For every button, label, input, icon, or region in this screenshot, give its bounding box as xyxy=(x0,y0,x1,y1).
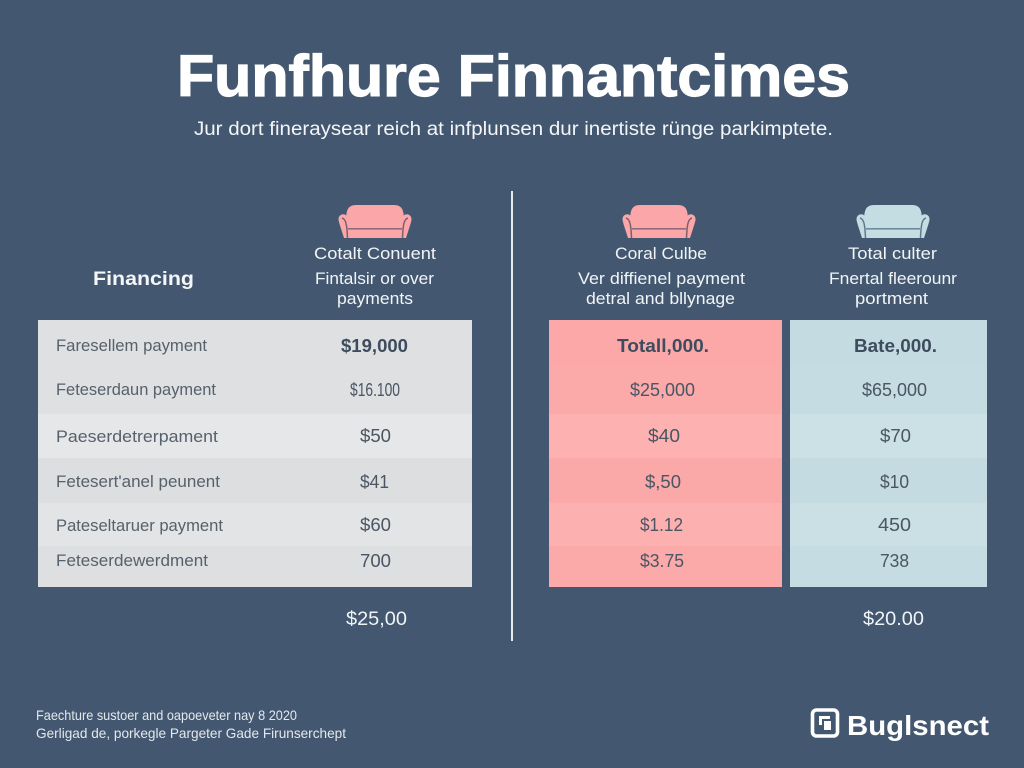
panel: coral table: $3.75 xyxy=(640,551,684,571)
row heading: Financing: Financing xyxy=(93,269,194,290)
panel: gray table: Pateseltaruer payment xyxy=(56,516,223,535)
total, gray column: $25,00 xyxy=(346,609,407,630)
total, blue column: $20.00 xyxy=(863,609,924,630)
panel: coral table: $1.12 xyxy=(640,515,683,535)
panel: light blue table: $70 xyxy=(880,426,911,446)
footer note xyxy=(36,707,346,741)
panel: gray table: $50 xyxy=(360,426,391,446)
panel: gray table: 700 xyxy=(360,551,391,571)
column 1 header: Fintalsir or over xyxy=(315,269,434,288)
column 2 header: detral and bllynage xyxy=(586,289,735,308)
panel: gray table: Fetesert'anel peunent xyxy=(56,472,220,491)
column 3 header: portment xyxy=(855,289,928,308)
subtitle: Jur dort fineraysear reich at infplunsen dur inertiste rünge parkimptete. xyxy=(194,119,833,140)
column 3 header xyxy=(829,244,957,308)
panel: gray table: Paeserdetrerpament xyxy=(56,427,218,446)
panel: coral table: $25,000 xyxy=(630,380,695,400)
panel: gray table: Feteserdaun payment xyxy=(56,380,216,399)
panel: coral table xyxy=(549,320,782,587)
icon: coral sofa, column 1 xyxy=(338,205,412,238)
panel: light blue table: 738 xyxy=(880,551,909,571)
panel: coral table: $,50 xyxy=(645,472,681,492)
logo wordmark: Buglsnect xyxy=(847,710,989,741)
panel: gray table: $16.100 xyxy=(350,380,400,400)
footer note: Gerligad de, porkegle Pargeter Gade Firunserchept xyxy=(36,725,346,741)
panel: light blue table xyxy=(790,320,987,587)
icon: logo mark xyxy=(812,710,838,736)
icon: light blue sofa, column 3 xyxy=(856,205,930,238)
panel: coral table: $40 xyxy=(648,426,680,446)
panel: light blue table: Bate,000. xyxy=(854,336,937,356)
title: Funfhure Finnantcimes xyxy=(177,44,850,109)
panel: gray table: $41 xyxy=(360,472,389,492)
panel: gray table: Feteserdewerdment xyxy=(56,551,208,570)
column 3 header: Total culter xyxy=(848,244,937,263)
column 2 header xyxy=(578,244,745,308)
column 2 header: Ver diffienel payment xyxy=(578,269,745,288)
column 1 header: Cotalt Conuent xyxy=(314,244,436,263)
panel: light blue table: $65,000 xyxy=(862,380,927,400)
panel: coral table: Totall,000. xyxy=(617,336,709,356)
column 2 header: Coral Culbe xyxy=(615,244,707,263)
footer note: Faechture sustoer and oapoeveter nay 8 2020 xyxy=(36,707,297,723)
column 3 header: Fnertal fleerounr xyxy=(829,269,957,288)
panel: light blue table: 450 xyxy=(878,515,911,535)
panel: gray table: $60 xyxy=(360,515,391,535)
panel: gray table: $19,000 xyxy=(341,336,408,356)
column 1 header: payments xyxy=(337,289,413,308)
panel: light blue table: $10 xyxy=(880,472,909,492)
panel: gray table: Faresellem payment xyxy=(56,336,207,355)
divider line xyxy=(511,191,513,641)
column 1 header xyxy=(314,244,436,308)
panel: gray table xyxy=(38,320,472,587)
icon: coral sofa, column 2 xyxy=(622,205,696,238)
